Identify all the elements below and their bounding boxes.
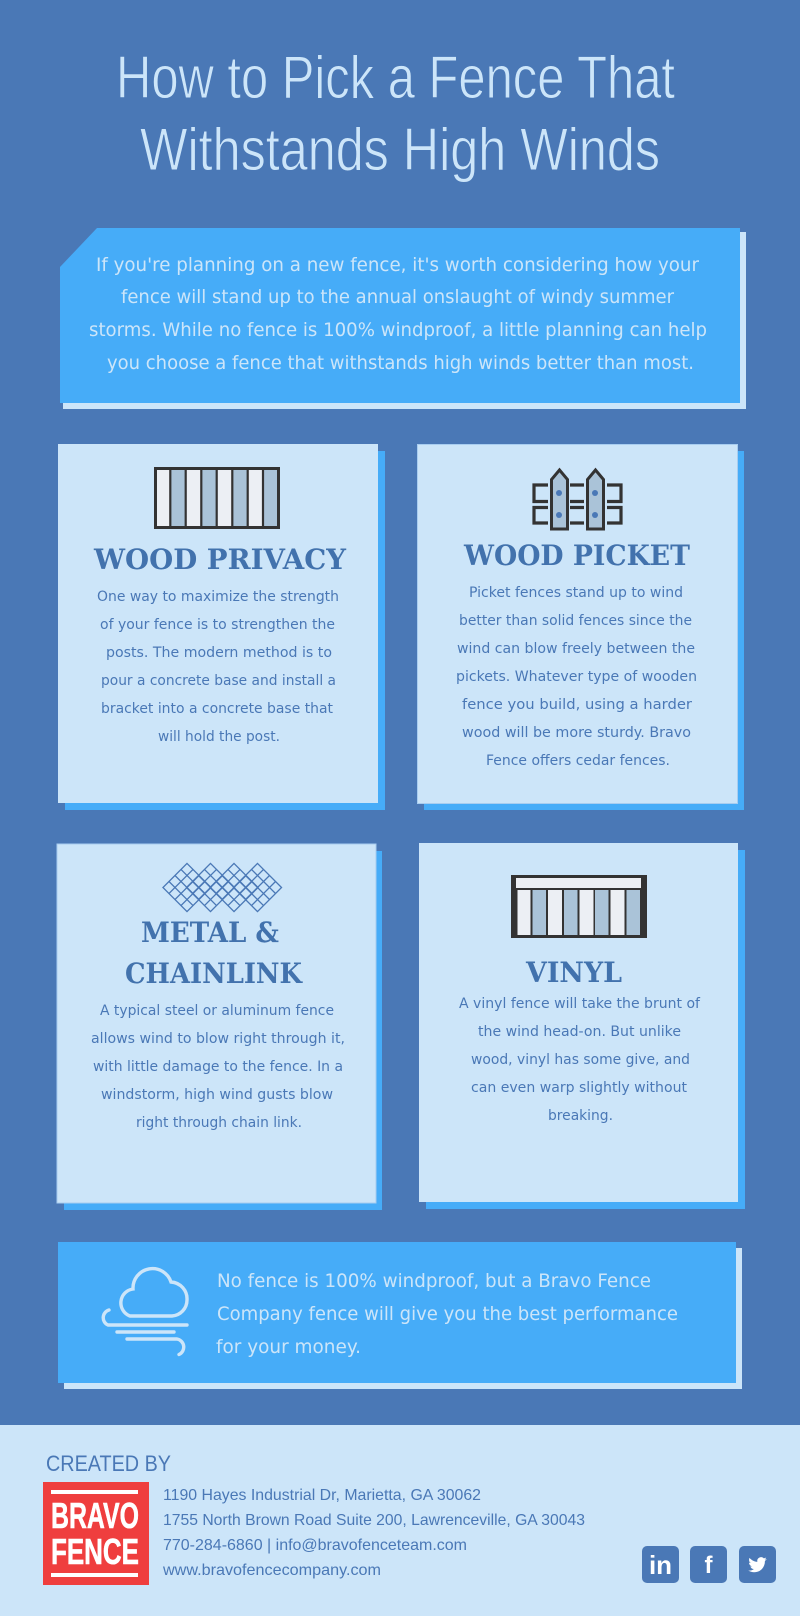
title: How to Pick a Fence That (116, 44, 675, 111)
text block: No fence is 100% windproof, but a Bravo Fence (217, 1270, 651, 1292)
heading: WOOD PRIVACY (93, 543, 347, 576)
panel: wood picket (418, 444, 744, 810)
contact details: 1190 Hayes Industrial Dr, Marietta, GA 30062 (163, 1487, 481, 1504)
icon: facebook: f (704, 1552, 714, 1579)
heading: WOOD PICKET (463, 539, 690, 572)
text block: wood, vinyl has some give, and (471, 1052, 690, 1068)
text block: pickets. Whatever type of wooden (456, 669, 697, 685)
icon: facebook (690, 1546, 727, 1583)
icon: picket fence (534, 470, 621, 529)
text block: can even warp slightly without (471, 1080, 687, 1096)
contact details (162, 1487, 585, 1579)
panel: intro: If you're planning on a new fence, it's worth considering how your (96, 254, 699, 276)
text block: with little damage to the fence. In a (93, 1059, 343, 1075)
text block: Fence offers cedar fences. (486, 753, 670, 769)
text block: wind can blow freely between the (457, 641, 695, 657)
text block (456, 585, 697, 769)
contact details: 770-284-6860 | info@bravofenceteam.com (163, 1537, 467, 1554)
icon: privacy fence (156, 468, 278, 528)
heading: CHAINLINK (125, 957, 304, 990)
text block (97, 589, 339, 745)
text block: fence you build, using a harder (462, 697, 692, 713)
icon: chainlink fence (163, 863, 282, 912)
text block: of your fence is to strengthen the (100, 617, 335, 633)
title: Withstands High Winds (140, 116, 660, 183)
text block: will hold the post. (158, 729, 280, 745)
icon: twitter (739, 1546, 776, 1583)
text block: Picket fences stand up to wind (469, 585, 683, 601)
text block (216, 1270, 678, 1358)
icon: linkedin (642, 1546, 679, 1583)
contact details: 1755 North Brown Road Suite 200, Lawrenceville, GA 30043 (163, 1512, 585, 1529)
icon: vinyl fence (511, 875, 647, 938)
panel: intro: storms. While no fence is 100% windproof, a little planning can help (89, 319, 707, 341)
logo: Bravo Fence: FENCE (51, 1531, 139, 1572)
logo: Bravo Fence: BRAVO (51, 1495, 139, 1536)
panel: vinyl (419, 843, 745, 1209)
contact details: www.bravofencecompany.com (162, 1562, 381, 1579)
text block: Company fence will give you the best performance (217, 1303, 678, 1325)
text block (459, 996, 701, 1124)
logo: Bravo Fence (43, 1482, 149, 1585)
text block: A typical steel or aluminum fence (100, 1003, 334, 1019)
panel: intro: you choose a fence that withstands high winds better than most. (107, 352, 694, 374)
panel: closing callout (58, 1242, 742, 1389)
icon: cloud and wind (103, 1269, 187, 1354)
panel: intro: fence will stand up to the annual onslaught of windy summer (121, 286, 674, 308)
heading: METAL & (141, 916, 279, 949)
text block: the wind head-on. But unlike (478, 1024, 681, 1040)
panel: intro (60, 228, 746, 409)
heading (125, 916, 304, 990)
heading: VINYL (525, 956, 622, 989)
text block: right through chain link. (136, 1115, 302, 1131)
text block: bracket into a concrete base that (101, 701, 333, 717)
text block: better than solid fences since the (459, 613, 692, 629)
text block: windstorm, high wind gusts blow (101, 1087, 333, 1103)
title (116, 44, 675, 183)
icon: linkedin: in (649, 1550, 672, 1580)
panel: footer (0, 1425, 800, 1616)
panel: wood privacy (58, 444, 385, 810)
panel: metal and chainlink (57, 844, 382, 1210)
text block: wood will be more sturdy. Bravo (462, 725, 691, 741)
text block: breaking. (548, 1108, 613, 1124)
text block: pour a concrete base and install a (101, 673, 336, 689)
text block (91, 1003, 345, 1131)
heading: created by: CREATED BY (46, 1451, 171, 1476)
text block: A vinyl fence will take the brunt of (459, 996, 701, 1012)
text block: One way to maximize the strength (97, 589, 339, 605)
text block: posts. The modern method is to (106, 645, 332, 661)
text block: allows wind to blow right through it, (91, 1031, 345, 1047)
text block: for your money. (216, 1336, 361, 1358)
